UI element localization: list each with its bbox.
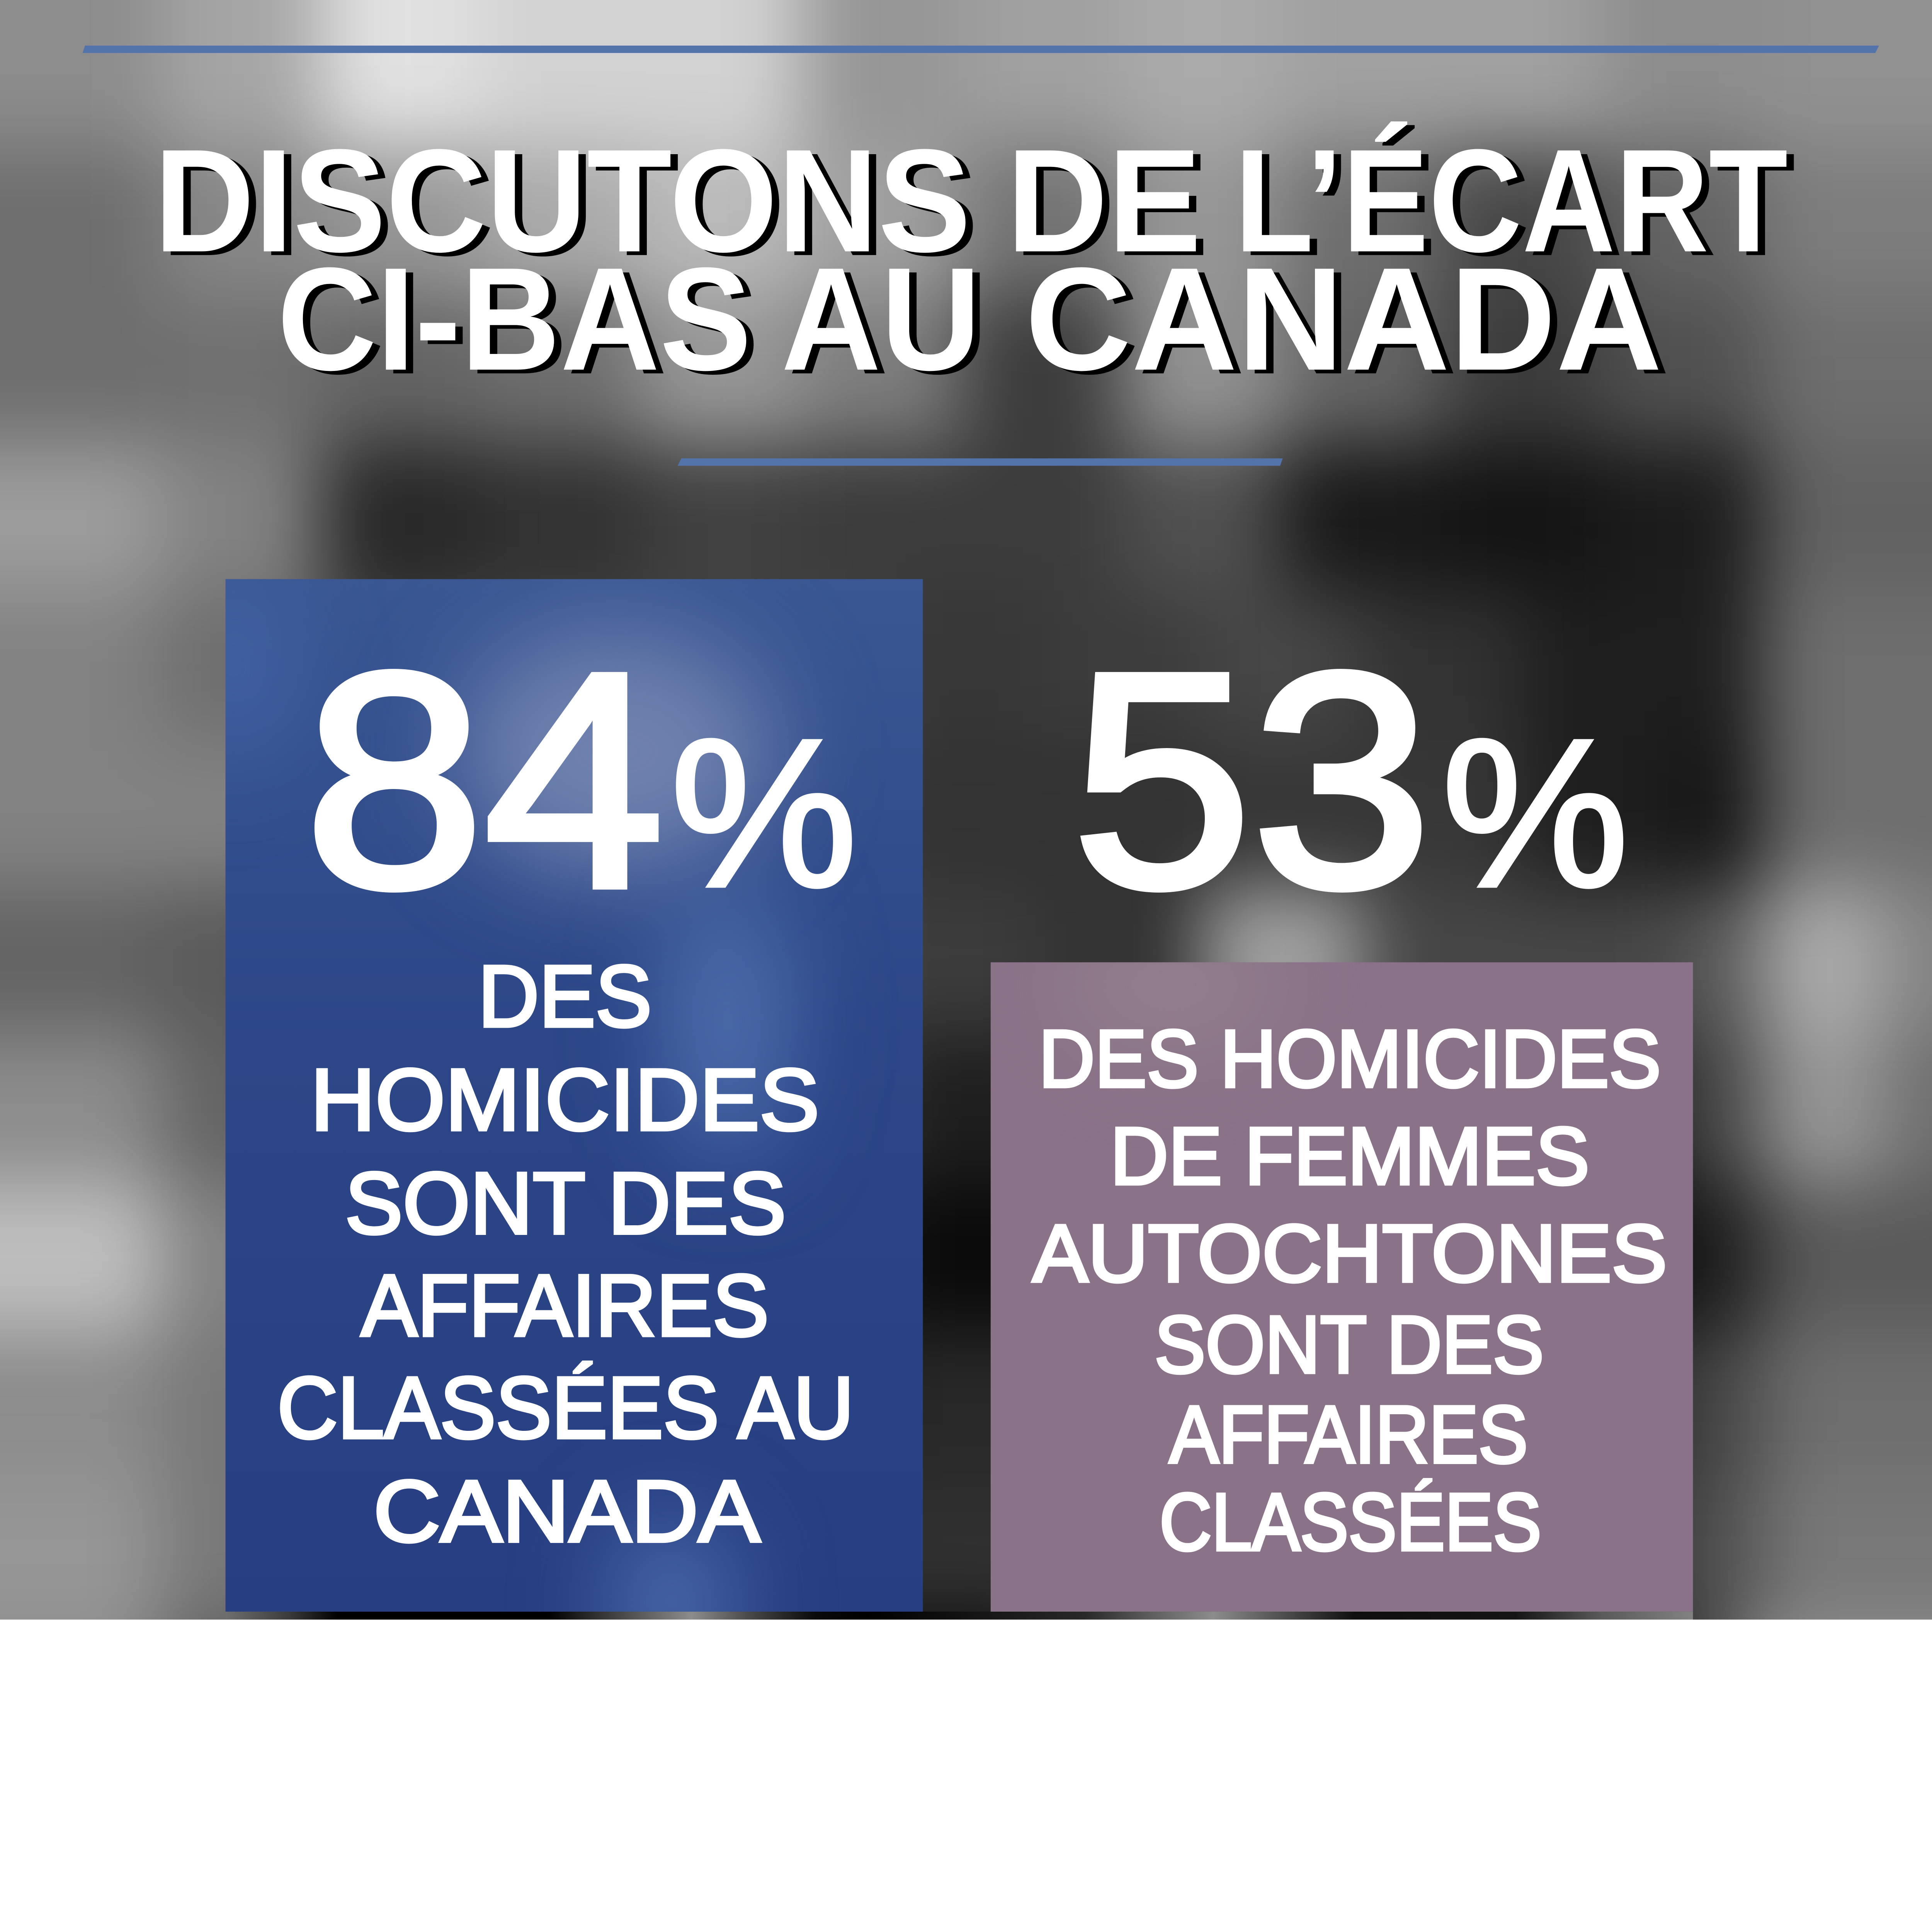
source note: de classement signifie qu’une accusation a été portée, qu’une personne ait — [32, 1787, 1100, 1822]
wordmark: CANADA: CANADA — [1349, 1817, 1556, 1851]
label: 84 percent description — [277, 947, 854, 1560]
label: 53 percent description: AUTOCHTONES — [1032, 1208, 1667, 1299]
title: CANADA — [1025, 237, 1662, 401]
title: AU — [789, 241, 988, 405]
panel: 84 percent, blue — [226, 579, 923, 1612]
title: AU — [781, 237, 981, 401]
footer band — [0, 1651, 1932, 1932]
source note: Source : L'Association des femmes autochtones du Canada, 2010. Le taux — [32, 1745, 1083, 1780]
title — [154, 119, 1795, 405]
label: 84 percent description: SONT DES — [345, 1154, 786, 1252]
title: CI-BAS — [277, 237, 752, 401]
wordmark: YWCA: CA — [1451, 1735, 1558, 1820]
label: 84 percent description: CANADA — [373, 1462, 760, 1560]
tagline: A TURNING POINT — [1617, 1747, 1841, 1769]
title: DE — [1007, 119, 1201, 283]
divider — [1590, 1749, 1593, 1846]
tagline — [1617, 1747, 1881, 1849]
wordmark: YWCA — [1333, 1735, 1558, 1820]
wordmark: YWCA: W — [1384, 1735, 1455, 1820]
label: 53 percent description: SONT DES — [1155, 1299, 1544, 1390]
tagline: FOR WOMEN — [1617, 1768, 1769, 1790]
statistic: 53%: % — [1442, 695, 1629, 931]
panel: 53 percent, mauve — [991, 936, 1693, 1612]
statistic: 84% — [304, 609, 857, 951]
title: CANADA — [1032, 241, 1670, 405]
title: DISCUTONS — [154, 119, 971, 283]
label: 84 percent description: HOMICIDES — [311, 1051, 820, 1148]
icon: YWCA triangle mark — [1185, 1721, 1325, 1866]
statistic: 84%: % — [670, 695, 857, 931]
wordmark: YWCA: Y — [1333, 1735, 1384, 1820]
statistic: 53%: 53 — [1072, 609, 1432, 951]
statistic: 84%: 84 — [304, 609, 664, 951]
label: 53 percent description: DE FEMMES — [1110, 1110, 1590, 1201]
label: 84 percent description: DES — [478, 947, 652, 1045]
source note: été ou non poursuivie ou déclarée coupable. — [32, 1828, 674, 1864]
label: 53 percent description — [1032, 1013, 1667, 1567]
label: 53 percent description: DES HOMICIDES — [1039, 1013, 1661, 1104]
tagline: UN POINT TOURNANT — [1617, 1803, 1881, 1825]
label: 53 percent description: AFFAIRES — [1169, 1389, 1528, 1480]
source note — [32, 1745, 1100, 1864]
label: 84 percent description: AFFAIRES — [361, 1257, 769, 1354]
title: L’ÉCART — [1235, 119, 1788, 283]
title: DISCUTONS — [162, 122, 978, 286]
label: 53 percent description: CLASSÉES — [1160, 1476, 1541, 1567]
title: CI-BAS — [285, 241, 759, 405]
tagline: POUR LES FEMMES — [1617, 1827, 1847, 1849]
title: DE — [1014, 122, 1209, 286]
lower accent line — [678, 458, 1283, 466]
YWCA Canada logo — [1185, 1721, 1881, 1866]
title: L’ÉCART — [1242, 122, 1795, 286]
statistic: 53% — [1072, 609, 1629, 951]
top accent line — [83, 46, 1879, 53]
label: 84 percent description: CLASSÉES AU — [277, 1359, 854, 1456]
